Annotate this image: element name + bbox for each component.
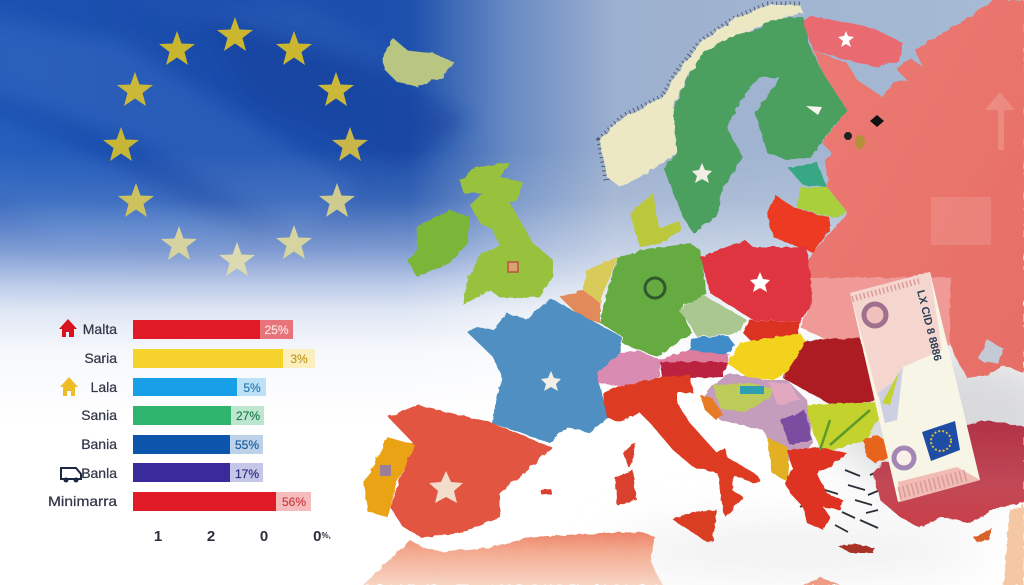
icon: Germany mark [645, 278, 665, 298]
map details [380, 31, 1015, 503]
map: Estonia [788, 162, 827, 187]
map: Russia [807, 0, 1024, 378]
row: Sania [81, 406, 264, 425]
Finland white mark [806, 106, 822, 115]
map of Europe [363, 0, 1024, 585]
euro banknote [850, 272, 980, 502]
row: Saria: Saria [84, 350, 117, 366]
row: Saria: 3% [290, 352, 308, 366]
chart axis: 0 [260, 528, 268, 545]
row: Minimarra [48, 492, 311, 511]
map: Austria pink [660, 350, 730, 363]
map: Netherlands [583, 257, 617, 303]
map: Azov sea [978, 340, 1005, 363]
map: Austria blue [688, 335, 735, 355]
map: Crete [838, 544, 875, 553]
map: Balearic islands [540, 488, 552, 495]
map: Great Britain [460, 163, 553, 305]
row: Banla: 17% [235, 467, 259, 481]
Russia lighter panel [931, 197, 991, 245]
row: Lala: Lala [91, 379, 117, 395]
map: Serbia [768, 382, 800, 405]
map: Romania [783, 338, 878, 408]
map: Balkans [703, 373, 813, 462]
row: Bania: Bania [81, 436, 117, 452]
map: Africa east [803, 577, 840, 585]
chart axis: 1 [154, 528, 162, 545]
map: Spain [388, 405, 553, 538]
row: Bania: 55% [235, 438, 259, 452]
map: Belgium [560, 290, 600, 323]
Norway coast spikes [600, 5, 800, 180]
row: Saria [84, 349, 315, 368]
row: Malta: Malta [83, 321, 117, 337]
EU flag stars [103, 17, 368, 276]
map: Albania [767, 437, 790, 483]
icon: Russia arrow [985, 92, 1015, 150]
map: Latvia [797, 187, 847, 218]
map: Portugal [364, 437, 415, 517]
map: Sicily [673, 510, 717, 542]
row: Malta [59, 319, 293, 339]
row: Malta: 25% [264, 323, 289, 337]
icon: Britain mark [508, 262, 518, 272]
banknote text: LX CID 8 8886 [914, 289, 943, 362]
map: Thrace [863, 435, 897, 463]
row: Bania [81, 435, 263, 454]
map: Czechia [678, 295, 747, 337]
map: Ukraine [800, 277, 950, 345]
row: Banla: Banla [81, 465, 117, 481]
map: Sweden and Finland [663, 17, 847, 233]
map: Turkey [873, 420, 1024, 528]
map: Norway [600, 5, 803, 187]
map: France [467, 298, 622, 443]
row: Minimarra: Minimarra [48, 493, 117, 509]
map: Cyprus [973, 528, 992, 543]
icon: stars on countries [429, 31, 854, 503]
map: Italy [603, 375, 760, 517]
map: Greece [785, 447, 847, 530]
chart axis: %, [322, 531, 331, 540]
chart axis [154, 528, 331, 545]
map: Kola peninsula [802, 17, 903, 67]
map: Slovakia [743, 320, 800, 347]
map: Ireland [407, 210, 470, 277]
Aegean islands [800, 470, 882, 532]
row: Sania: Sania [81, 407, 117, 423]
map: Adriatic coast [700, 395, 723, 420]
map: Switzerland [597, 350, 660, 387]
bar chart [48, 319, 331, 545]
icon: Russia black marks [844, 115, 884, 149]
map: Poland [700, 240, 813, 322]
map: Hungary [727, 333, 807, 380]
row: Lala: 5% [243, 381, 261, 395]
map: Lithuania and Belarus [767, 195, 830, 253]
row: Minimarra: 56% [282, 495, 306, 509]
row: Lala [60, 377, 266, 396]
map: Middle East [1003, 505, 1024, 585]
chart axis: 2 [207, 528, 215, 545]
map: Slovenia [660, 362, 727, 378]
chart axis: 0 [313, 528, 322, 545]
map: North Africa [363, 532, 663, 585]
map: Bulgaria [807, 402, 887, 450]
map: Bosnia [780, 410, 812, 445]
map: Sardinia [615, 470, 637, 505]
map: Denmark [630, 193, 680, 247]
map: Germany [600, 243, 707, 357]
map: Croatia [713, 383, 772, 412]
map: Iceland [382, 38, 455, 87]
Balkan teal mark [740, 386, 764, 394]
icon: Portugal mark [380, 465, 391, 476]
map: Corsica [623, 442, 635, 467]
leaf strokes [820, 410, 870, 450]
row: Banla [61, 463, 263, 482]
row: Sania: 27% [236, 409, 260, 423]
